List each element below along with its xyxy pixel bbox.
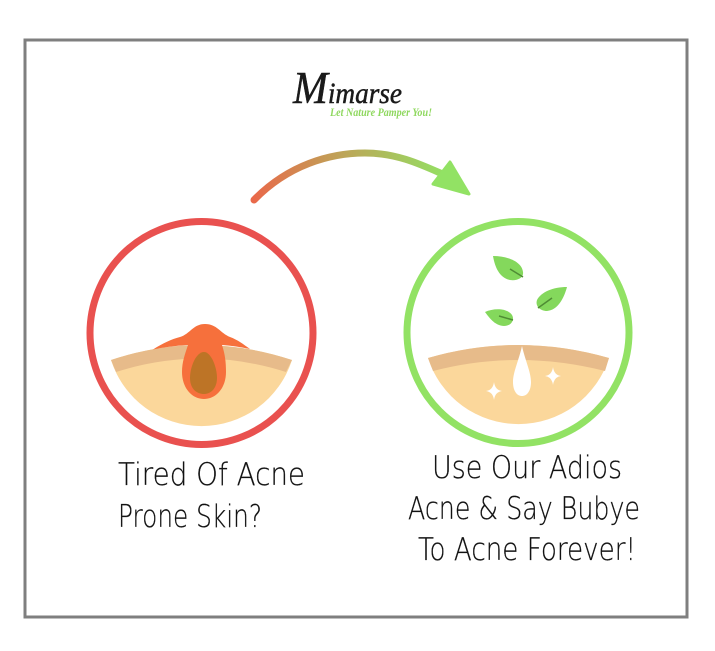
right caption [408, 450, 640, 568]
left caption [118, 457, 305, 535]
right caption: Acne & Say Bubye [408, 491, 640, 527]
logo [292, 62, 432, 119]
healthy skin base [428, 345, 609, 424]
panel: clear skin [407, 222, 629, 444]
logo wordmark: Mimarse [292, 62, 402, 113]
leaf top [493, 256, 523, 280]
pimple core [190, 352, 217, 394]
white drop [513, 346, 531, 396]
skin base [111, 345, 292, 426]
arrow [254, 153, 469, 200]
left caption: Tired Of Acne [118, 457, 305, 493]
sparkle left [486, 382, 502, 400]
right caption: To Acne Forever! [418, 532, 636, 568]
green ring [407, 222, 629, 444]
panel: acne skin [90, 222, 313, 444]
logo tagline: Let Nature Pamper You! [329, 105, 432, 119]
sparkle right [545, 367, 561, 385]
left caption: Prone Skin? [118, 499, 262, 535]
right caption: Use Our Adios [432, 450, 622, 486]
pimple [153, 324, 250, 399]
healthy skin top layer [428, 345, 609, 371]
skin top layer [111, 345, 292, 372]
leaf bottom [485, 309, 513, 326]
red ring [90, 222, 313, 444]
leaf right [537, 287, 567, 311]
